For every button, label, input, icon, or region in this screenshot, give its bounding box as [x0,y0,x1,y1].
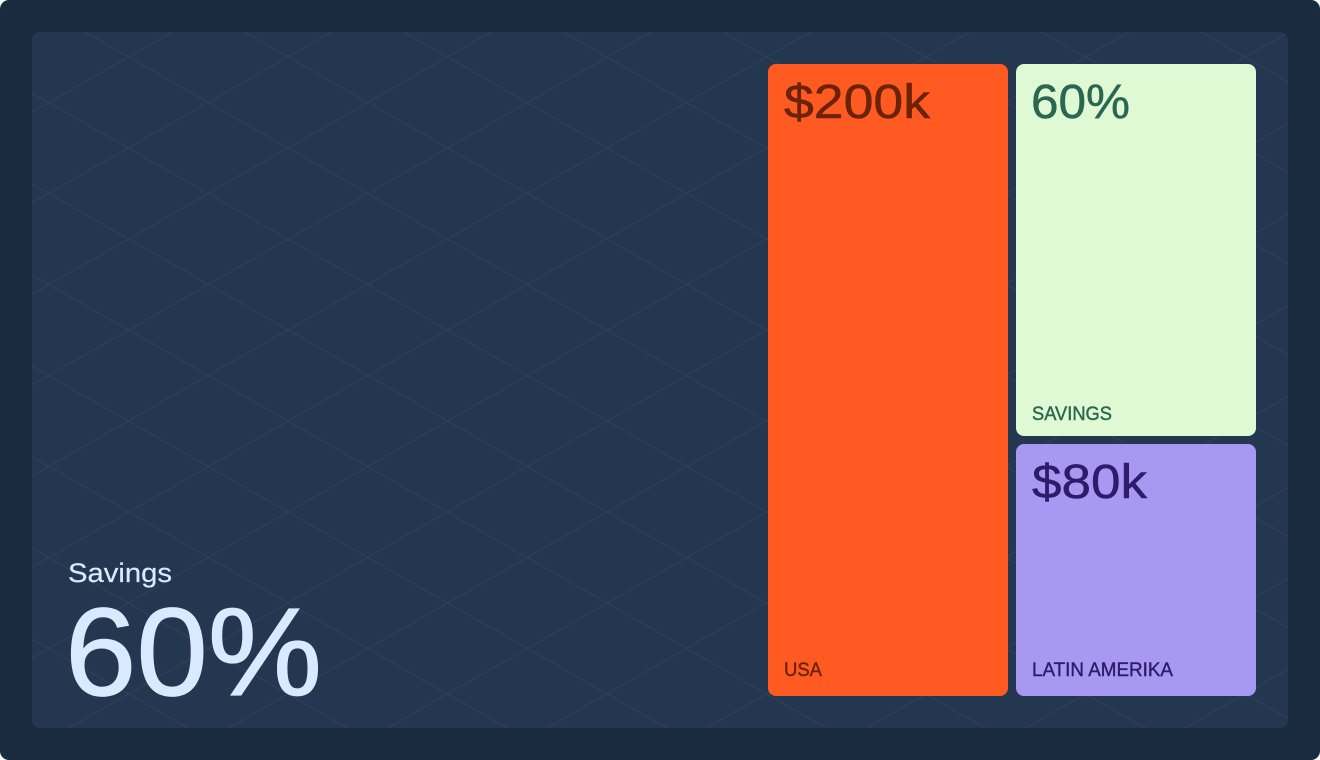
headline stat [65,558,322,722]
panel: USA [768,64,1008,696]
value: $80k: $80k [1032,456,1148,509]
label: LATIN AMERIKA: LATIN AMERIKA [1032,660,1173,681]
label: USA: USA [784,660,822,681]
value: $200k: $200k [784,76,931,129]
label: SAVINGS: SAVINGS [1032,404,1112,425]
panel: savings [1016,64,1256,436]
stat label: Savings: Savings [68,558,172,588]
value: 60%: 60% [1031,76,1130,129]
panel: Latin America [1016,444,1256,696]
stat value: 60%: 60% [65,583,322,722]
